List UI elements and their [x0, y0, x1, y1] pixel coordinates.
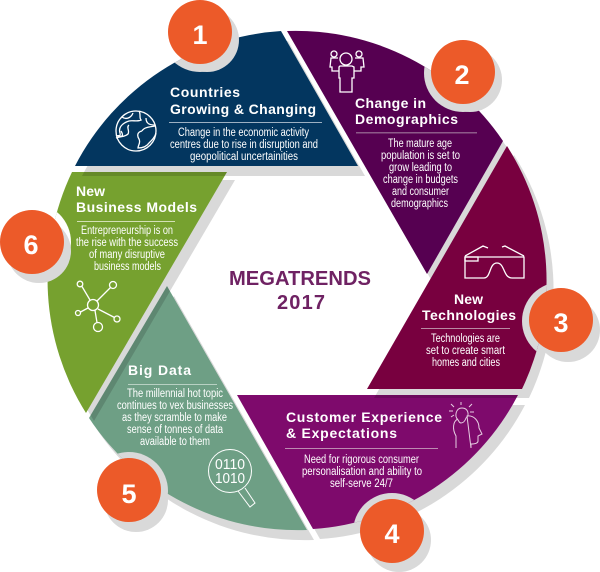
text block: big data: continues to vex businesses: [117, 400, 233, 412]
text block: demographics: population is set to: [381, 150, 460, 162]
icon: people: [330, 51, 364, 92]
badge 3: [522, 282, 600, 362]
text block: countries: [169, 84, 322, 163]
badge 4: [353, 493, 431, 572]
shadow of new business models segment: [56, 180, 235, 421]
text block: countries: Growing & Changing: [170, 101, 316, 117]
text block: demographics: Demographics: [355, 111, 458, 127]
text block: demographics: change in budgets: [383, 174, 458, 186]
text block: demographics: and consumer: [392, 186, 449, 198]
text block: countries: Change in the economic activity: [178, 127, 309, 139]
text block: new technologies: homes and cities: [432, 357, 500, 369]
badge 4: 4: [384, 519, 400, 549]
panel: demographics segment: [287, 31, 503, 274]
badge 2: 2: [454, 60, 470, 90]
panel: new technologies segment: [367, 146, 547, 389]
text block: new business models: business models: [94, 261, 161, 273]
text block: new business models: of many disruptive: [89, 249, 165, 261]
text block: new business models: [76, 183, 197, 273]
panel: new business models segment: [48, 172, 227, 413]
text block: countries: Countries: [170, 84, 240, 100]
title: [229, 268, 371, 314]
badge 6: [0, 203, 71, 283]
text block: new business models: the rise with the success: [76, 237, 178, 249]
badge 1: [161, 0, 239, 72]
title: 2017: [277, 292, 325, 314]
text block: demographics: Change in: [355, 95, 426, 111]
text block: countries: geopolitical uncertainities: [190, 151, 298, 163]
text block: customer experience: Need for rigorous consumer: [304, 454, 419, 466]
text block: big data: available to them: [140, 436, 210, 448]
text block: customer experience: [285, 409, 442, 490]
text block: demographics: grow leading to: [389, 162, 452, 174]
icon: smart glasses: [465, 246, 524, 278]
text block: countries: centres due to rise in disruption and: [170, 139, 318, 151]
text block: demographics: The mature age: [388, 138, 452, 150]
text block: new business models: Business Models: [76, 199, 197, 215]
badge 5: [90, 452, 168, 532]
icon: magnifier with binary digits: 0110: [215, 457, 245, 473]
text block: big data: Big Data: [128, 362, 191, 378]
text block: customer experience: Customer Experience: [286, 409, 442, 425]
icon: globe: [116, 111, 156, 151]
shadow of new technologies segment: [374, 155, 554, 398]
icon: head with light bulb: [449, 402, 482, 448]
text block: demographics: [355, 95, 477, 210]
text block: big data: The millennial hot topic: [127, 388, 223, 400]
text block: new technologies: New: [454, 291, 483, 307]
badge 2: [424, 34, 502, 112]
text block: new business models: Entrepreneurship is on: [81, 225, 173, 237]
icon: magnifier with binary digits: 1010: [215, 471, 245, 487]
shadow of countries segment: [82, 41, 365, 176]
text block: customer experience: personalisation and ability to: [302, 466, 422, 478]
title: MEGATRENDS: [229, 268, 371, 290]
badge 6: 6: [23, 230, 39, 260]
icon: network nodes: [76, 281, 120, 332]
text block: customer experience: self-serve 24/7: [330, 478, 393, 490]
panel: countries segment: [75, 31, 358, 166]
badge 1: 1: [192, 20, 208, 50]
text block: demographics: demographics: [391, 198, 448, 210]
text block: big data: [117, 362, 233, 448]
text block: new business models: New: [76, 183, 105, 199]
panel shadows: lower segments: [96, 40, 525, 540]
badge 5: 5: [121, 479, 137, 509]
panel: customer experience segment: [237, 395, 518, 529]
text block: new technologies: set to create smart: [426, 345, 506, 357]
panel: big data segment: [89, 286, 307, 530]
icon: magnifier with binary digits: [208, 450, 255, 507]
badge 3: 3: [553, 308, 569, 338]
text block: customer experience: & Expectations: [286, 425, 397, 441]
text block: new technologies: Technologies are: [431, 333, 500, 345]
text block: new technologies: [421, 291, 516, 369]
text block: new technologies: Technologies: [422, 307, 516, 323]
text block: big data: as they scramble to make: [122, 412, 227, 424]
text block: big data: sense of tonnes of data: [127, 424, 223, 436]
